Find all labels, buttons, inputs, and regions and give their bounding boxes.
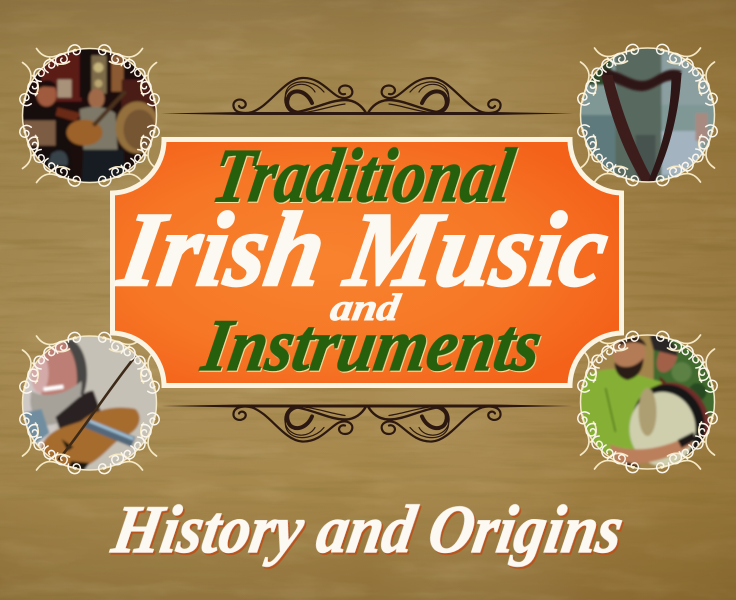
- bottom scroll ornament: [161, 404, 573, 442]
- photo: band playing in a pub: [18, 45, 161, 186]
- heading: Traditional: Traditional: [207, 134, 520, 218]
- photo: smiling fiddler: [18, 332, 161, 474]
- heading: Instruments: Instruments: [196, 305, 547, 387]
- panel: orange sign with cream border: [112, 140, 622, 386]
- subtitle: History and Origins: History and Origins: [106, 491, 629, 567]
- top scroll ornament: [161, 78, 573, 115]
- heading: Irish Music: Irish Music: [110, 192, 616, 309]
- photo: bodhran player in green shirt: [576, 331, 719, 474]
- heading: and: and: [327, 287, 404, 329]
- photo: harp against a stone wall: [576, 44, 719, 186]
- title sign panel: [110, 134, 622, 387]
